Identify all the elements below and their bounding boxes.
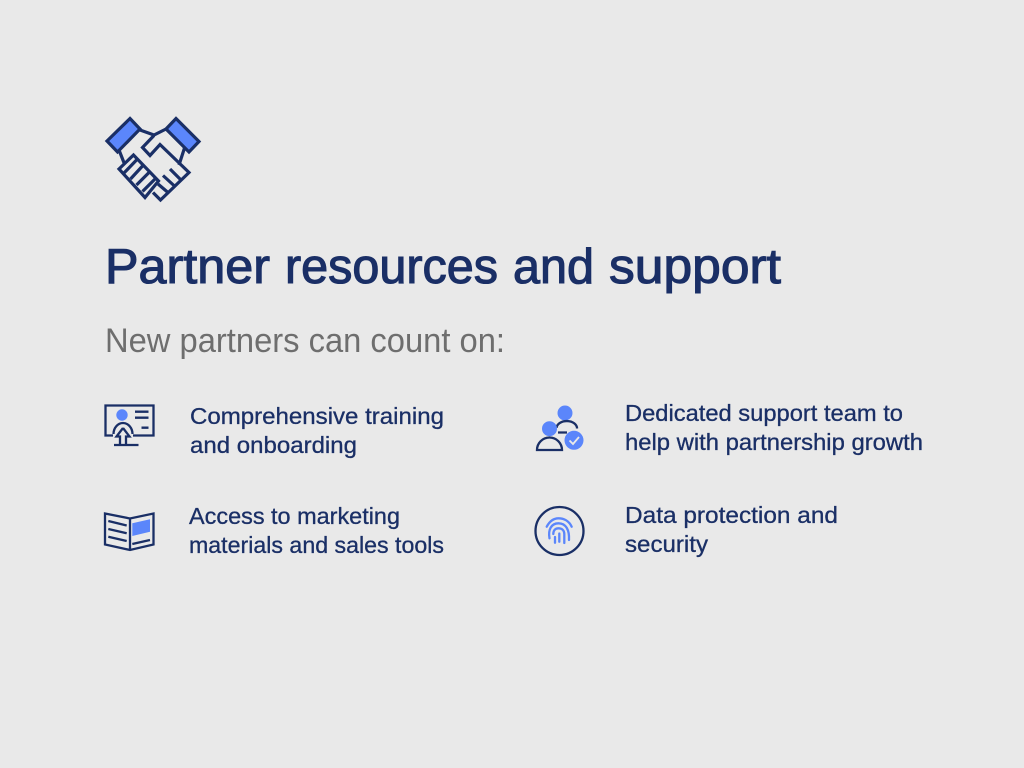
item: data protection — [536, 502, 838, 557]
item: training and onboarding — [106, 403, 444, 458]
title: and — [513, 240, 594, 294]
label: support team: help with partnership growth — [625, 429, 923, 455]
item: support team — [537, 400, 923, 455]
title: resources — [285, 240, 498, 294]
icon: presenter at screen — [106, 406, 154, 445]
subtitle: New partners can count on: — [105, 322, 505, 360]
title: support — [609, 240, 781, 294]
label: training and onboarding: and onboarding — [190, 432, 357, 458]
icon: handshake — [107, 118, 199, 200]
item: marketing materials — [105, 503, 444, 558]
title: Partner — [105, 240, 270, 294]
label: marketing materials: Access to marketing — [189, 503, 400, 529]
label: marketing materials: materials and sales tools — [189, 532, 444, 558]
label: support team: Dedicated support team to — [625, 400, 903, 426]
label: data protection: Data protection and — [625, 502, 838, 528]
icon: team with check badge — [537, 406, 584, 450]
icon: fingerprint in circle — [536, 507, 584, 555]
label: data protection: security — [625, 531, 709, 557]
icon: open book — [105, 514, 154, 550]
label: training and onboarding: Comprehensive training — [190, 403, 444, 429]
